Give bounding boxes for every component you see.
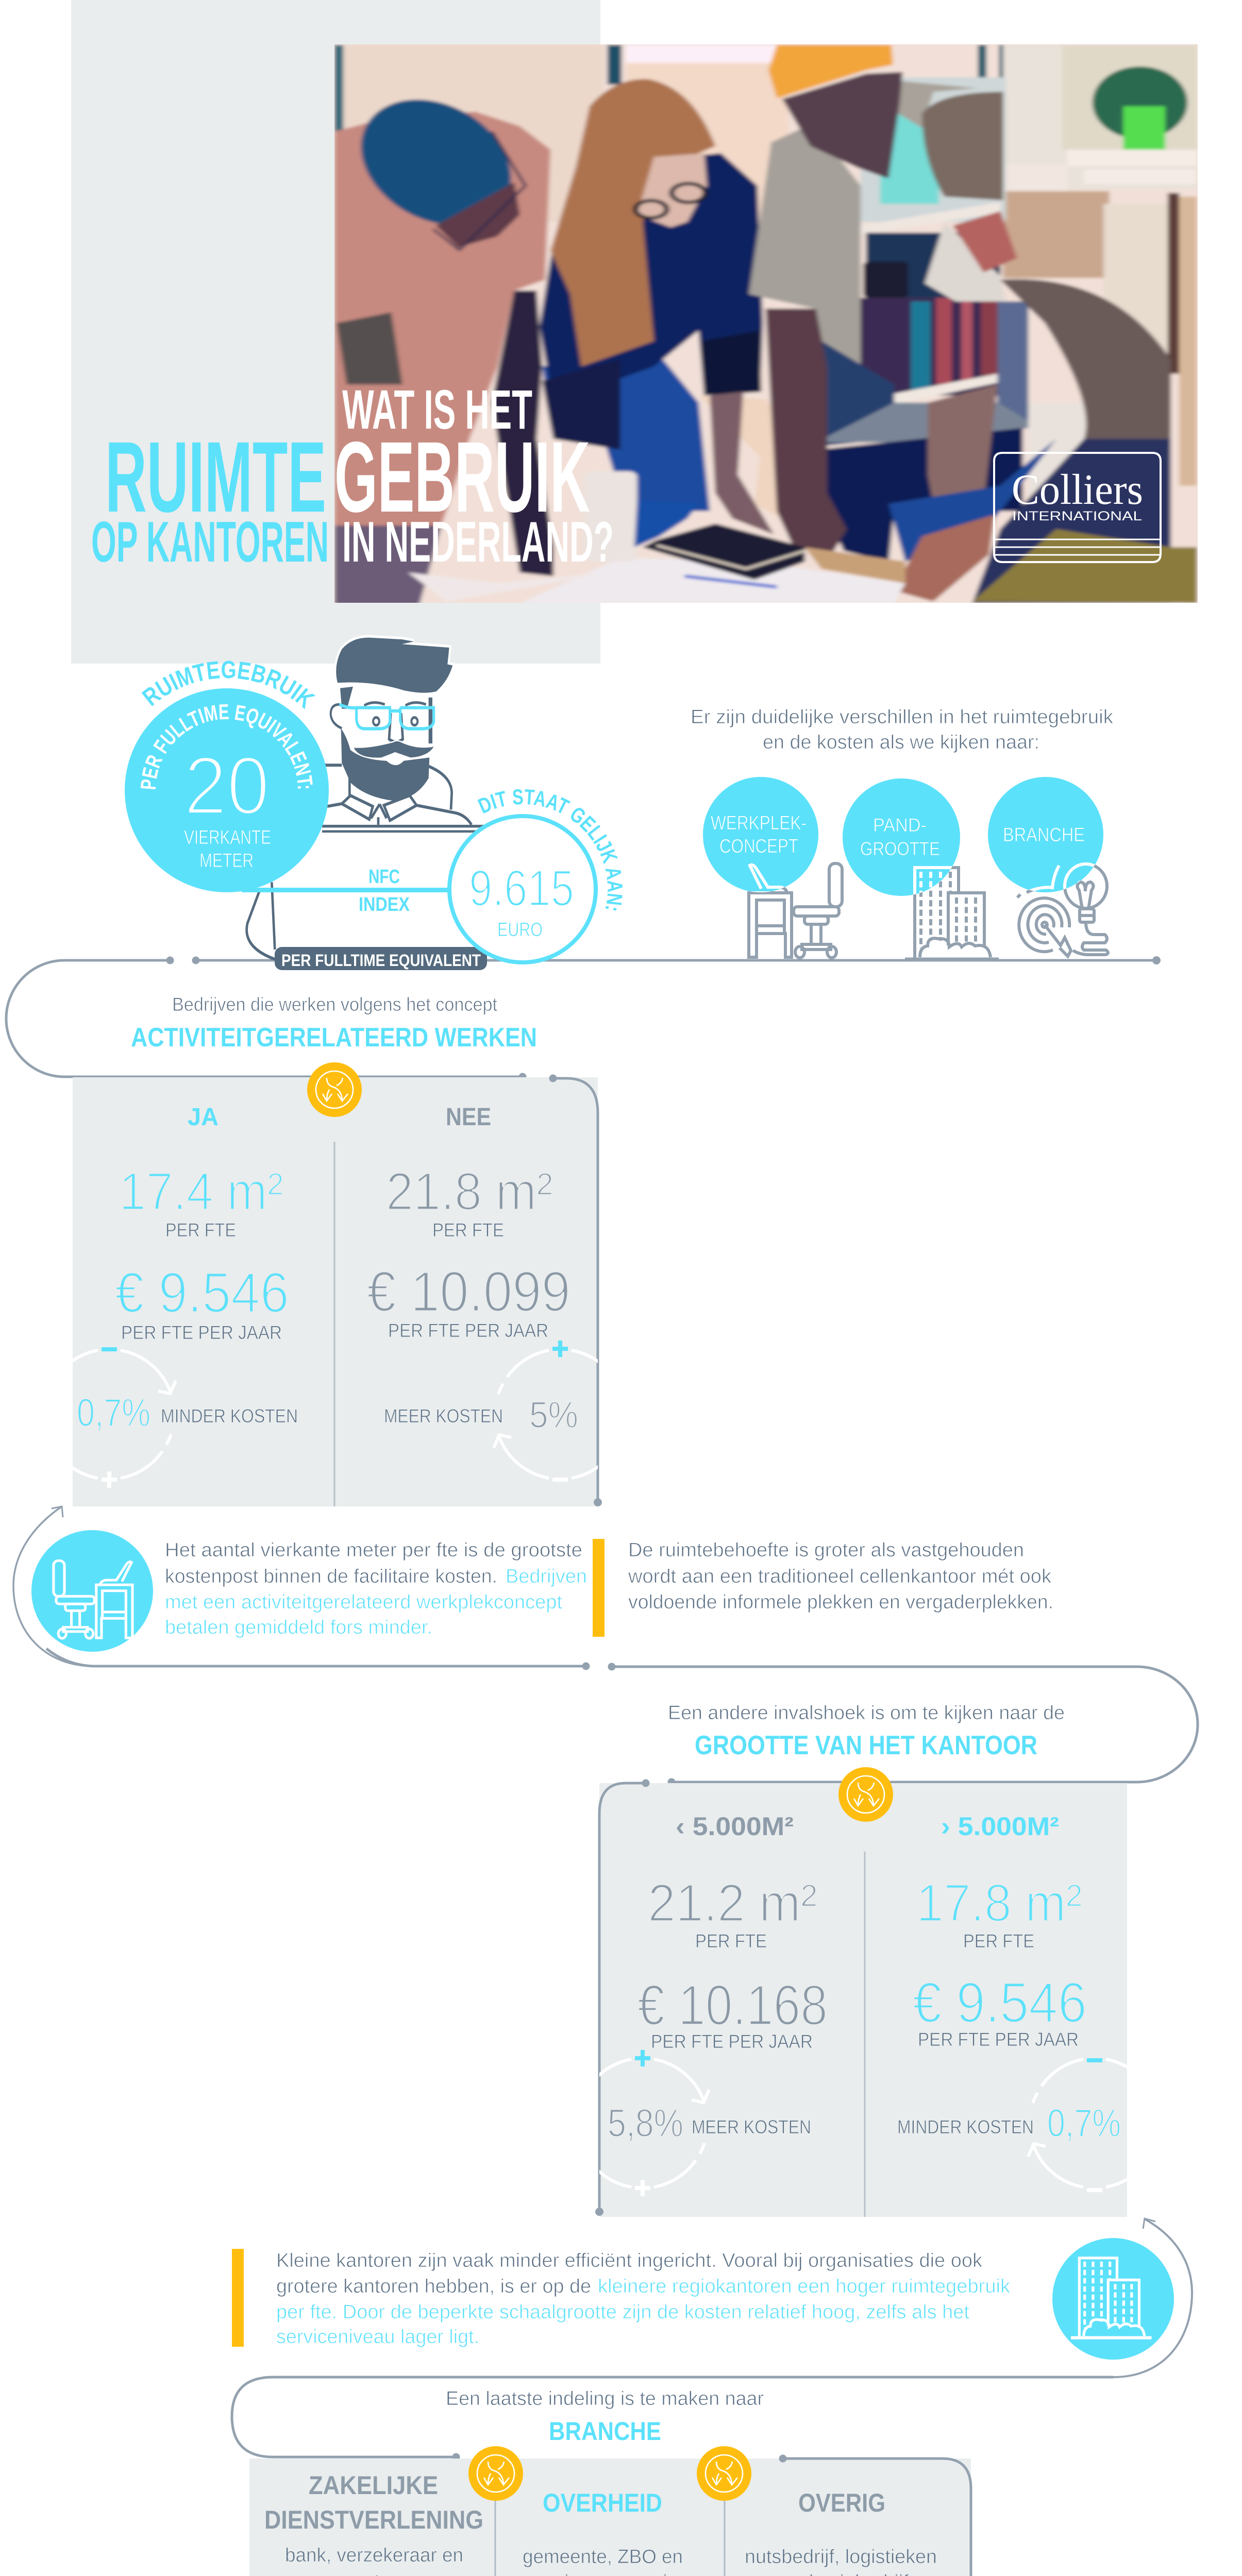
column: kleiner dan 5.000 m2 — [637, 1812, 828, 2052]
section 3 intro: BRANCHE — [549, 2417, 661, 2446]
illustration: bearded man at desk — [247, 638, 490, 959]
circle: ruimtegebruik 20 vierkante meter: PER FULLTIME EQUIVALENT: — [141, 704, 313, 789]
hero photo — [330, 41, 1201, 608]
column: ja: PER FTE PER JAAR — [121, 1322, 282, 1343]
ring: 5,8% meer kosten: 5,8% — [608, 2102, 683, 2145]
text block: vierkante meter: Het aantal vierkante meter per fte is de grootste — [165, 1539, 582, 1561]
ring: 0,7% minder kosten: MINDER KOSTEN — [897, 2116, 1034, 2138]
circle: ruimtegebruik 20 vierkante meter: RUIMTEGEBRUIK — [141, 660, 315, 709]
column: kleiner dan 5.000 m2: PER FTE PER JAAR — [651, 2031, 813, 2052]
circle: 9.615 euro: 9.615 — [469, 859, 574, 917]
column: ja: € 9.546 — [115, 1261, 289, 1325]
ring: 5,8% meer kosten — [580, 2050, 811, 2196]
column: kleiner dan 5.000 m2: ‹ 5.000M² — [676, 1812, 794, 1841]
column: groter dan 5.000 m2: € 9.546 — [913, 1971, 1087, 2035]
ring: 0,7% minder kosten — [73, 1347, 297, 1488]
column: nee — [367, 1104, 570, 1341]
intro text: en de kosten als we kijken naar: — [763, 732, 1039, 753]
connector: curved arrow and curve into section 3 — [232, 2218, 1192, 2461]
text block: vierkante meter: Bedrijven — [506, 1566, 587, 1587]
icon: target and light bulb — [1017, 860, 1108, 956]
title: wat is het ruimtegebruik op kantoren in nederland — [91, 378, 614, 574]
badge: per fulltime equivalent: PER FULLTIME EQUIVALENT — [281, 951, 481, 970]
intro text: Er zijn duidelijke verschillen in het ruimtegebruik — [691, 706, 1114, 728]
column: ja: JA — [188, 1104, 219, 1131]
gold divider — [232, 2249, 244, 2347]
text block: kleine kantoren — [276, 2250, 1011, 2348]
column: overheid — [513, 2488, 694, 2576]
connector: curve into section 1 — [6, 956, 527, 1081]
icon: office buildings — [905, 863, 999, 959]
title: wat is het ruimtegebruik op kantoren in nederland: WAT IS HET — [342, 378, 532, 440]
column: nee: PER FTE PER JAAR — [388, 1320, 548, 1341]
column: kleiner dan 5.000 m2: PER FTE — [695, 1930, 767, 1952]
text block: ruimtebehoefte: De ruimtebehoefte is groter als vastgehouden — [628, 1539, 1024, 1561]
circle: 9.615 euro: DIT STAAT GELIJK AAN: — [477, 789, 623, 911]
column: overheid: gemeente, ZBO en — [523, 2546, 683, 2568]
text block: vierkante meter: kostenpost binnen de facilitaire kosten. — [165, 1566, 497, 1587]
section 2 intro — [668, 1702, 1065, 1760]
column: nee: 21.8 m² — [386, 1162, 553, 1221]
column: ja: PER FTE — [165, 1219, 236, 1241]
ring: 5,8% meer kosten: MEER KOSTEN — [692, 2116, 811, 2138]
column: groter dan 5.000 m2: PER FTE — [963, 1930, 1034, 1952]
logo: Colliers International — [994, 453, 1161, 562]
circle: ruimtegebruik 20 vierkante meter: 20 — [184, 739, 270, 832]
logo: Colliers International: Colliers — [1012, 466, 1143, 514]
circle: branche — [988, 777, 1103, 892]
connector: NFC index bar — [242, 866, 448, 916]
circle: ruimtegebruik 20 vierkante meter: METER — [199, 850, 254, 872]
column: nee: NEE — [446, 1104, 491, 1131]
column: groter dan 5.000 m2: PER FTE PER JAAR — [918, 2029, 1079, 2050]
column: zakelijke dienstverlening: DIENSTVERLENING — [264, 2505, 483, 2534]
column: nee: € 10.099 — [367, 1260, 570, 1324]
circle: 9.615 euro — [447, 789, 623, 964]
title: wat is het ruimtegebruik op kantoren in nederland: OP KANTOREN — [91, 510, 329, 574]
panel: grootte van het kantoor comparison — [580, 1767, 1157, 2217]
column: nee: PER FTE — [432, 1219, 504, 1241]
section 1 intro — [131, 994, 537, 1053]
text block: kleine kantoren: Kleine kantoren zijn vaak minder efficiënt ingericht. Vooral bij organisaties die ook — [276, 2250, 983, 2272]
circle: pandgrootte: GROOTTE — [860, 838, 940, 859]
column: zakelijke dienstverlening — [264, 2471, 483, 2576]
connector: curved arrow to section 2 — [13, 1506, 590, 1670]
text block: kleine kantoren: kleinere regiokantoren een hoger ruimtegebruik — [598, 2276, 1011, 2297]
column: overig: nutsbedrijf, logistieken — [745, 2546, 937, 2568]
text block: ruimtebehoefte: voldoende informele plekken en vergaderplekken. — [628, 1591, 1053, 1613]
logo: Colliers International: INTERNATIONAL — [1012, 509, 1142, 523]
title: wat is het ruimtegebruik op kantoren in nederland: GEBRUIK — [334, 421, 590, 533]
circle: branche: BRANCHE — [1003, 824, 1085, 846]
text block: kleine kantoren: grotere kantoren hebben, is er op de — [276, 2276, 591, 2297]
connector line: main timeline with end dots — [192, 956, 1161, 964]
gold divider — [593, 1539, 605, 1637]
column: ja: 17.4 m² — [119, 1162, 283, 1221]
icon: desk and chair — [742, 860, 842, 958]
column: kleiner dan 5.000 m2: € 10.168 — [637, 1974, 828, 2037]
connector: NFC index bar: INDEX — [359, 894, 410, 916]
column: overheid: OVERHEID — [543, 2488, 662, 2517]
circle: 9.615 euro: EURO — [497, 919, 543, 941]
ring: 0,7% minder kosten: 0,7% — [77, 1391, 150, 1435]
section 2 intro: GROOTTE VAN HET KANTOOR — [695, 1731, 1037, 1760]
circle: ruimtegebruik 20 vierkante meter: VIERKANTE — [184, 827, 271, 849]
icon: desk in cyan circle — [31, 1530, 153, 1652]
title: wat is het ruimtegebruik op kantoren in nederland: RUIMTE — [105, 421, 326, 533]
column: kleiner dan 5.000 m2: 21.2 m² — [648, 1873, 817, 1933]
ring: 5% meer kosten: MEER KOSTEN — [384, 1405, 503, 1427]
circle: werkplekconcept — [703, 777, 818, 892]
column: zakelijke dienstverlening: ZAKELIJKE — [309, 2471, 438, 2500]
intro text — [691, 706, 1114, 753]
icon: buildings in cyan circle — [1052, 2238, 1174, 2360]
circle: pandgrootte: PAND- — [873, 815, 927, 836]
section 2 intro: Een andere invalshoek is om te kijken naar de — [668, 1702, 1065, 1724]
column: groter dan 5.000 m2 — [913, 1812, 1087, 2050]
column: groter dan 5.000 m2: › 5.000M² — [941, 1812, 1059, 1841]
column: overig — [745, 2488, 937, 2576]
title: wat is het ruimtegebruik op kantoren in nederland: IN NEDERLAND? — [342, 510, 614, 574]
circle: pandgrootte — [843, 778, 960, 896]
circle: ruimtegebruik 20 vierkante meter — [125, 660, 329, 892]
ring: 5% meer kosten — [385, 1341, 598, 1482]
coin icon — [468, 2446, 523, 2501]
ring: 0,7% minder kosten — [897, 2058, 1157, 2192]
panel: branche comparison — [206, 2446, 975, 2576]
ring: 0,7% minder kosten: MINDER KOSTEN — [161, 1405, 298, 1427]
coin icon — [838, 1767, 893, 1822]
connector: NFC index bar: NFC — [368, 866, 400, 888]
text block: vierkante meter: betalen gemiddeld fors minder. — [165, 1617, 432, 1638]
section 1 intro: Bedrijven die werken volgens het concept — [172, 994, 498, 1015]
circle: werkplekconcept: WERKPLEK- — [711, 812, 807, 834]
column: ja — [115, 1104, 289, 1343]
coin icon — [697, 2446, 751, 2501]
section 1 intro: ACTIVITEITGERELATEERD WERKEN — [131, 1023, 537, 1053]
text block: vierkante meter: met een activiteitgerelateerd werkplekconcept — [165, 1591, 562, 1613]
text block: vierkante meter — [165, 1539, 587, 1638]
column: zakelijke dienstverlening: bank, verzekeraar en — [285, 2545, 463, 2566]
text block: kleine kantoren: per fte. Door de beperkte schaalgrootte zijn de kosten relatief hoog, zelfs als het — [276, 2301, 969, 2323]
panel: header grey block — [71, 0, 600, 664]
ring: 0,7% minder kosten: 0,7% — [1047, 2102, 1121, 2145]
panel: activiteitgerelateerd werken comparison — [46, 1062, 623, 1506]
ring: 5% meer kosten: 5% — [529, 1395, 578, 1436]
text block: ruimtebehoefte — [628, 1539, 1053, 1613]
section 3 intro — [446, 2388, 764, 2446]
column: overig: OVERIG — [798, 2488, 885, 2517]
circle: werkplekconcept: CONCEPT — [719, 836, 798, 857]
coin icon — [307, 1062, 362, 1117]
text block: ruimtebehoefte: wordt aan een traditioneel cellenkantoor mét ook — [628, 1566, 1052, 1587]
section 3 intro: Een laatste indeling is te maken naar — [446, 2388, 764, 2410]
column: groter dan 5.000 m2: 17.8 m² — [916, 1873, 1082, 1933]
connector: curve into section 2 — [608, 1663, 1198, 1786]
text block: kleine kantoren: serviceniveau lager ligt. — [276, 2326, 479, 2348]
